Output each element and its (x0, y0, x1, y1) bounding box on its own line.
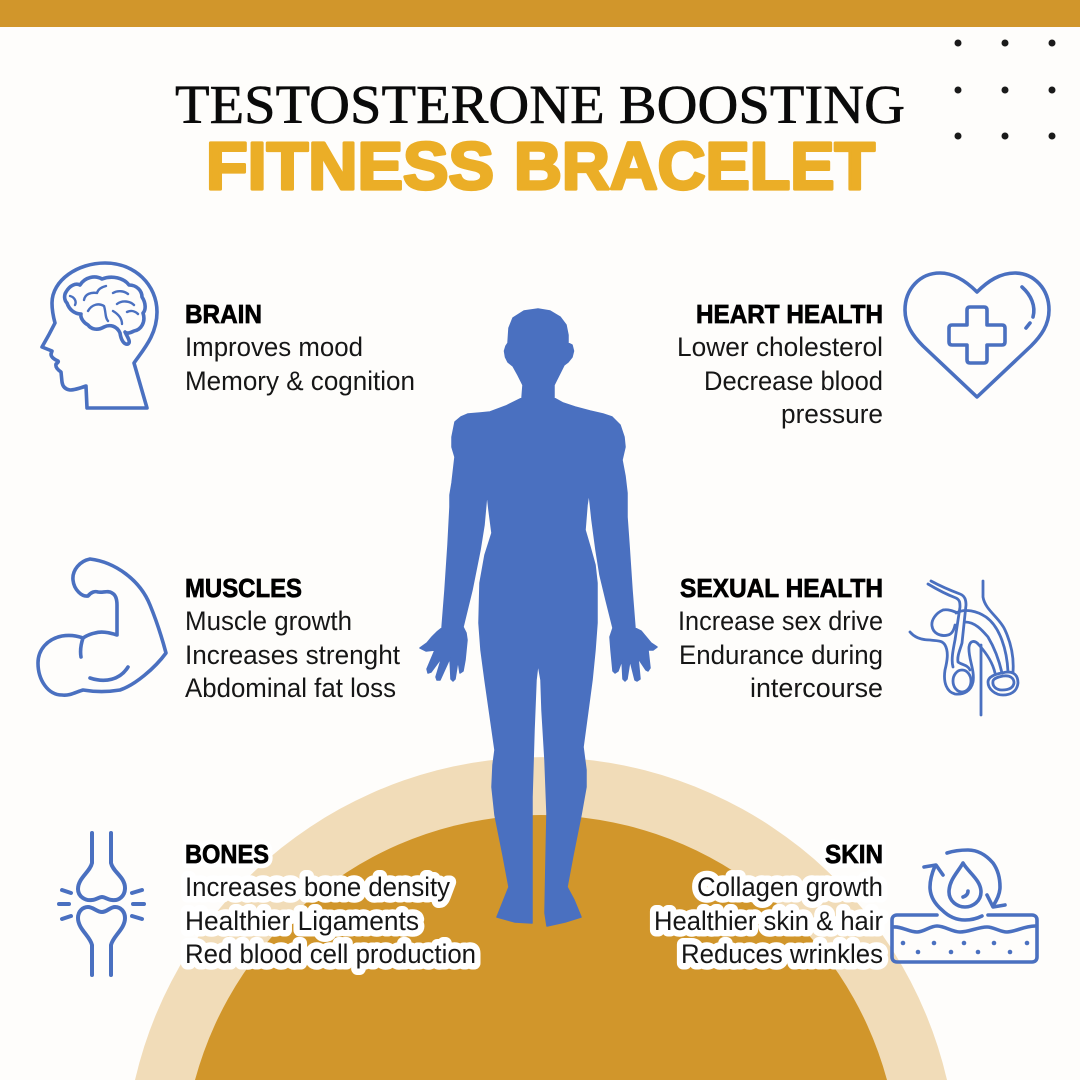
text: muscles: Increases strenght (185, 640, 400, 670)
icon: flexed arm (38, 559, 166, 695)
dot grid (954, 40, 1056, 140)
top bar (0, 0, 1080, 27)
text: sexual health (678, 573, 883, 703)
panel: skin (654, 839, 1037, 969)
text: brain: BRAIN (185, 299, 262, 329)
panel: brain (42, 263, 415, 408)
icon: reproductive anatomy (910, 581, 1018, 715)
text: sexual health: SEXUAL HEALTH (680, 573, 883, 603)
icon: knee joint (59, 833, 144, 975)
text: muscles: Muscle growth (185, 606, 352, 636)
text: bones: Increases bone density (185, 872, 450, 902)
icon: heart with cross (905, 273, 1049, 397)
text: bones (185, 839, 476, 969)
text: skin: SKIN (825, 839, 883, 869)
text: skin: SKIN (825, 839, 883, 869)
skin dots (901, 941, 1029, 954)
panel: muscles (38, 559, 400, 703)
title: TESTOSTERONE BOOSTING (175, 74, 905, 135)
text: skin (654, 839, 883, 969)
icon: head with brain (42, 263, 157, 408)
background arcs (135, 757, 947, 1080)
text: bones: BONES (185, 839, 269, 869)
text: brain: Memory & cognition (185, 366, 415, 396)
text: sexual health: Increase sex drive (678, 606, 883, 636)
human body silhouette (420, 309, 657, 926)
text: bones: Red blood cell production (185, 939, 476, 969)
panel: sexual health (678, 573, 1018, 715)
text: heart health: HEART HEALTH (696, 299, 883, 329)
text: brain (185, 299, 415, 396)
panel: heart health (677, 273, 1049, 429)
text: heart health: Lower cholesterol (677, 332, 883, 362)
text: skin: Collagen growth (697, 872, 883, 902)
text: heart health: Decrease blood (704, 366, 883, 396)
panel: bones (59, 833, 476, 975)
text: muscles: Abdominal fat loss (185, 673, 396, 703)
title: BRACELET (514, 129, 875, 204)
text: brain: Improves mood (185, 332, 363, 362)
text: sexual health: Endurance during (679, 640, 883, 670)
text: heart health (677, 299, 883, 429)
text: skin: Reduces wrinkles (681, 939, 883, 969)
title: FITNESS (206, 129, 494, 204)
text: bones: Healthier Ligaments (185, 906, 419, 936)
text: bones: BONES (185, 839, 269, 869)
title (175, 74, 905, 204)
text: muscles (185, 573, 400, 703)
text: heart health: pressure (781, 399, 883, 429)
text: skin: Healthier skin & hair (654, 906, 883, 936)
icon: skin with water drop (892, 850, 1037, 962)
text: muscles: MUSCLES (185, 573, 302, 603)
text: sexual health: intercourse (750, 673, 883, 703)
